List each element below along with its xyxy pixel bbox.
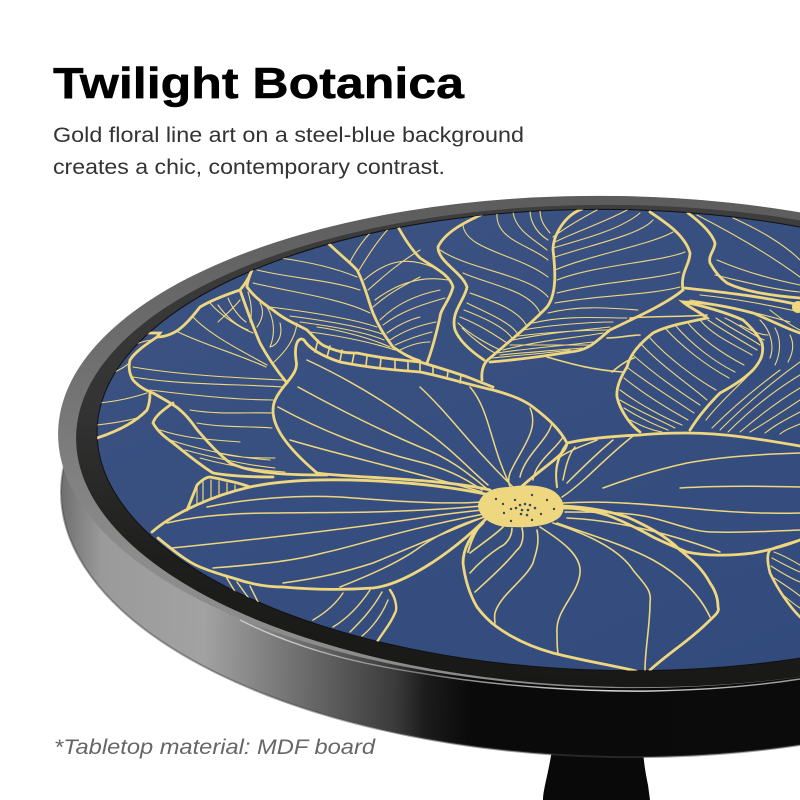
leaf: top center veins <box>440 210 685 358</box>
leaf: left large <box>97 267 327 510</box>
leaf: lower right fragment <box>768 540 800 617</box>
description text <box>53 124 524 179</box>
flower: lower left petal veins <box>167 496 490 587</box>
leaf: upper right veins <box>690 215 800 330</box>
flower: lower left petal <box>152 480 490 589</box>
flower: center disk <box>478 485 564 527</box>
tabletop glass panel <box>93 200 800 680</box>
flower: center seed dots <box>495 494 555 522</box>
leaf: left large veins <box>97 292 297 505</box>
gold floral line art <box>97 209 800 671</box>
table rim side <box>57 233 800 767</box>
leaf: top center outline <box>438 209 690 380</box>
rim top surface <box>72 195 800 697</box>
rim highlight <box>240 620 800 691</box>
rim outer bevel <box>54 186 800 698</box>
flower: right petal veins <box>556 436 800 552</box>
leaf: upper right <box>685 213 800 305</box>
leaf: right middle <box>617 302 800 432</box>
footnote: *Tabletop material: MDF board <box>54 736 376 759</box>
leaf: top left veins <box>253 227 461 383</box>
flower: upper left petal <box>273 339 567 490</box>
title: Twilight Botanica <box>53 59 465 108</box>
flower: right petal <box>556 433 800 555</box>
flower bud dot right edge <box>792 301 800 313</box>
flower: upper left petal veins <box>278 360 563 492</box>
description text: Gold floral line art on a steel-blue background <box>53 124 524 147</box>
table pedestal <box>543 750 650 800</box>
description text: creates a chic, contemporary contrast. <box>53 156 445 179</box>
flower: bottom petal veins <box>470 523 710 670</box>
leaf: top left <box>247 225 493 387</box>
leaf: right middle veins <box>620 318 800 434</box>
leaf: middle stems <box>547 315 707 372</box>
leaf: lower left fragment <box>200 567 396 642</box>
flower: bottom petal <box>463 506 718 671</box>
